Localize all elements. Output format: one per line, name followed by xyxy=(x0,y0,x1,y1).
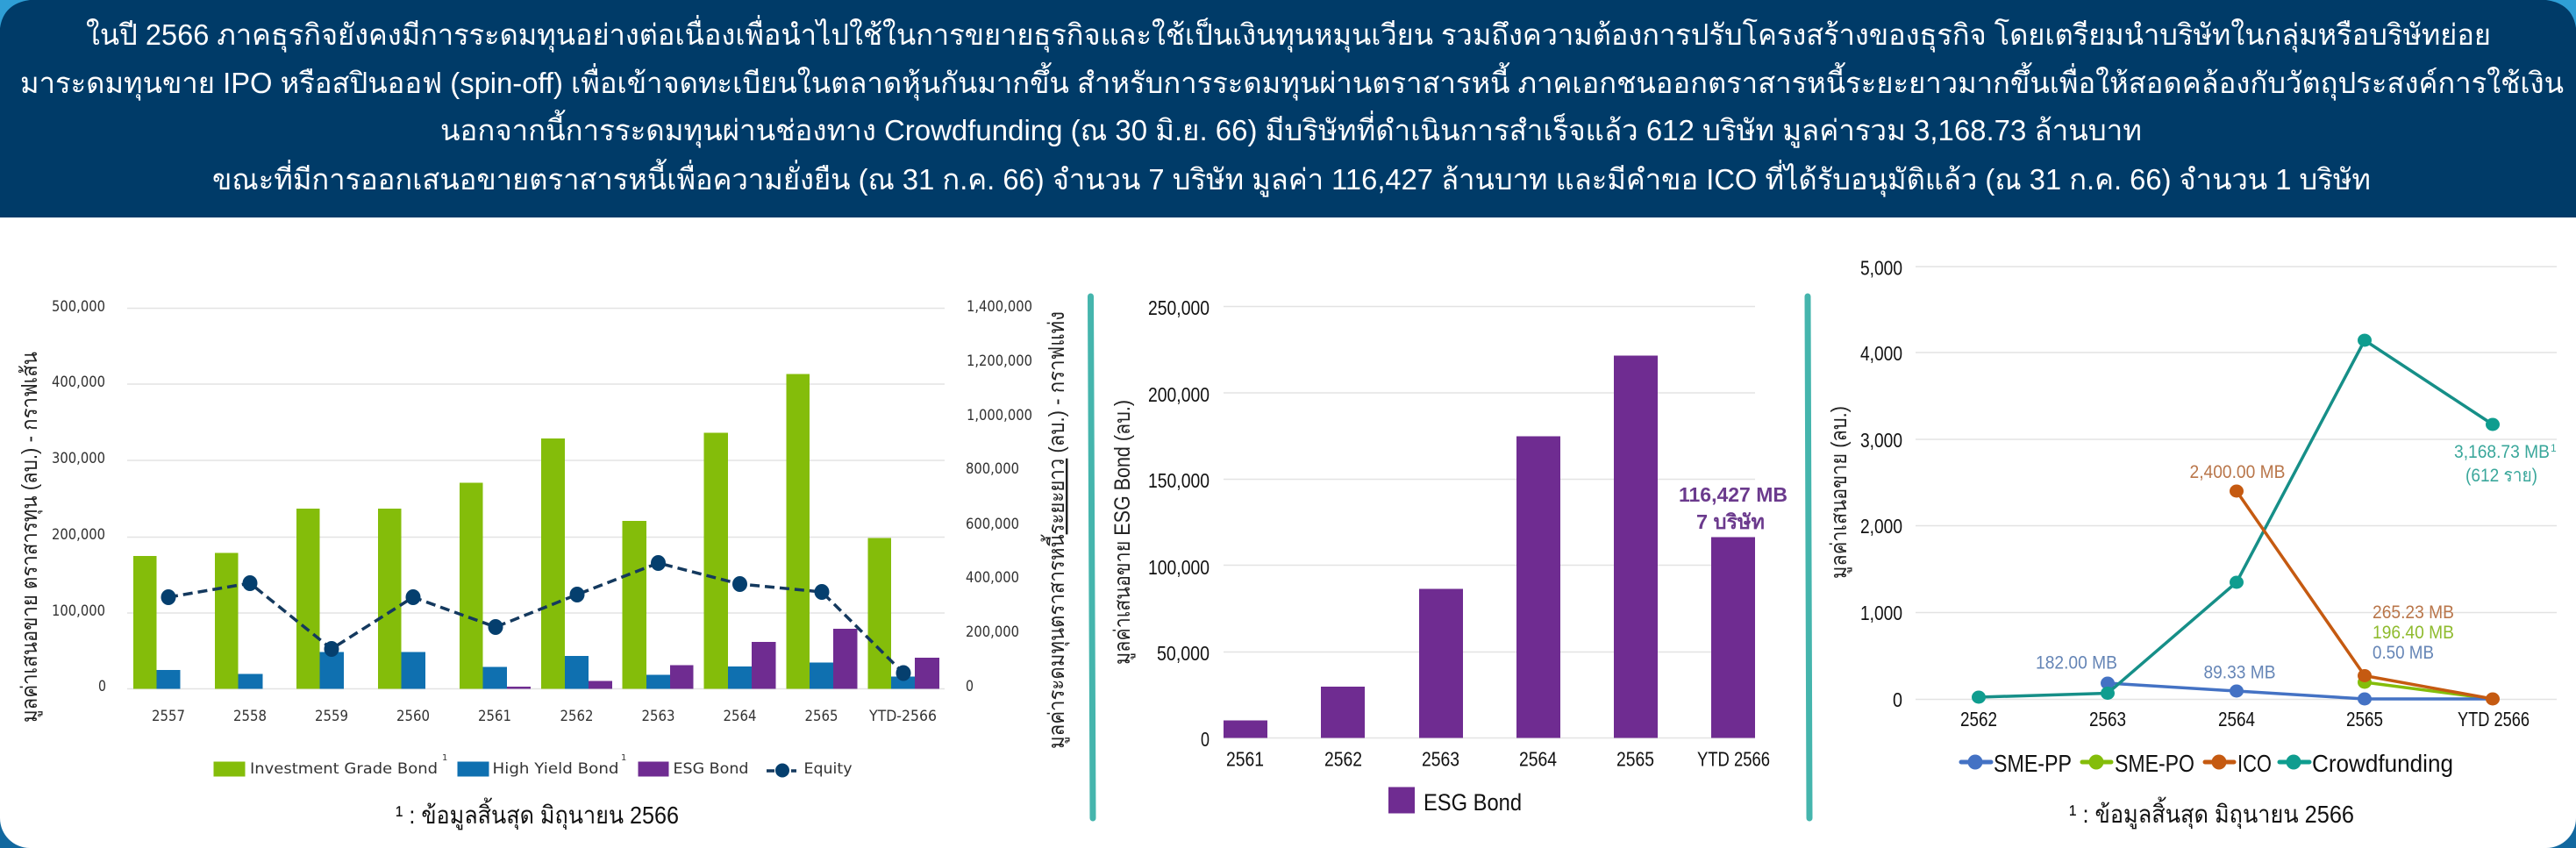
divider right xyxy=(1808,296,1809,818)
panel: SME, ICO and crowdfunding chart xyxy=(1827,256,2557,830)
legend: Equity xyxy=(803,760,853,778)
legend: High Yield Bond xyxy=(493,760,619,778)
category labels: 2562 xyxy=(560,708,593,725)
gridlines and value labels: 2,000 xyxy=(1860,515,1902,538)
category labels xyxy=(1960,708,2530,730)
legend: 1 xyxy=(442,753,447,763)
category labels: YTD 2566 xyxy=(2458,708,2530,730)
data labels: 89.33 MB xyxy=(2203,663,2275,682)
gridlines and value labels: 0 xyxy=(1893,688,1902,711)
gridlines and value labels: 200,000 xyxy=(1148,383,1210,406)
callout: YTD value: 7 บริษัท xyxy=(1696,510,1765,533)
gridlines and value labels: 3,000 xyxy=(1860,429,1902,452)
gridlines and value labels xyxy=(1860,256,2557,711)
category labels: 2559 xyxy=(315,708,348,725)
category labels: 2565 xyxy=(1616,747,1654,770)
header text line 1: ในปี 2566 ภาคธุรกิจยังคงมีการระดมทุนอย่างต่อเนื่องเพื่อนำไปใช้ในการขยายธุรกิจและใช้เป็นเงินทุนหมุนเวียน รวมถึงความต้องการปรับโครงสร้างของธุรกิจ โดยเตรียมนำบริษัทในกลุ่มหรือบริษัทย่อย xyxy=(86,15,2491,53)
axis title: มูลค่าเสนอขาย (ลบ.) xyxy=(1827,406,1852,579)
left axis gridlines and labels: 300,000 xyxy=(52,450,105,467)
category labels: 2558 xyxy=(233,708,267,725)
category labels: 2565 xyxy=(2346,708,2383,730)
right axis labels: 1,200,000 xyxy=(967,353,1032,370)
gridlines and value labels: 100,000 xyxy=(1148,556,1210,579)
category labels: 2563 xyxy=(1422,747,1459,770)
category labels xyxy=(152,708,937,725)
gridlines and value labels: 150,000 xyxy=(1148,469,1210,492)
legend: ICO xyxy=(2237,750,2272,777)
right axis labels xyxy=(966,298,1032,695)
panel: chart background xyxy=(0,175,2576,848)
category labels: 2564 xyxy=(2218,708,2255,730)
header text line 4: ขณะที่มีการออกเสนอขายตราสารหนี้เพื่อความยั่งยืน (ณ 31 ก.ค. 66) จำนวน 7 บริษัท มูลค่า 116,427 ล้านบาท และมีคำขอ ICO ที่ได้รับอนุมัติแล้ว (ณ 31 ก.ค. 66) จำนวน 1 บริษัท xyxy=(212,159,2371,197)
gridlines and value labels: 4,000 xyxy=(1860,342,1902,365)
category labels: YTD-2566 xyxy=(868,708,937,725)
left axis gridlines and labels xyxy=(52,298,945,695)
right axis labels: 400,000 xyxy=(966,569,1019,587)
right axis labels: 200,000 xyxy=(966,624,1019,641)
gridlines and value labels: 1,000 xyxy=(1860,602,1902,624)
bars: investment grade bond xyxy=(133,374,891,689)
legend: SME-PO xyxy=(2115,750,2194,777)
bars: ESG bond by year xyxy=(1224,356,1755,738)
category labels: 2565 xyxy=(805,708,838,725)
left axis gridlines and labels: 100,000 xyxy=(52,602,105,620)
axis title: มูลค่าเสนอขาย ESG Bond (ลบ.) xyxy=(1110,400,1136,665)
bars: high yield bond xyxy=(156,652,915,689)
category labels: 2560 xyxy=(396,708,430,725)
gridlines and value labels xyxy=(1148,296,1755,751)
category labels: 2564 xyxy=(723,708,756,725)
line: crowdfunding xyxy=(1972,333,2500,703)
gridlines and value labels: 0 xyxy=(1201,728,1210,751)
line: SME-PP xyxy=(2101,677,2493,705)
data labels: 196.40 MB xyxy=(2373,623,2454,643)
line: equity xyxy=(161,555,910,681)
line: SME-PO xyxy=(2358,675,2493,699)
bars: ESG bond xyxy=(507,629,939,689)
data labels: (612 ราย) xyxy=(2465,466,2537,486)
legend: SME-PP xyxy=(1994,750,2072,777)
category labels: 2562 xyxy=(1960,708,1997,730)
footnote: ¹ : ข้อมูลสิ้นสุด มิถุนายน 2566 xyxy=(396,797,679,830)
data labels: 3,168.73 MB xyxy=(2454,442,2550,462)
callout: YTD value: 116,427 MB xyxy=(1679,483,1788,506)
data labels: 265.23 MB xyxy=(2373,602,2454,623)
left axis gridlines and labels: 400,000 xyxy=(52,374,105,391)
category labels: 2561 xyxy=(478,708,511,725)
legend xyxy=(1388,787,1522,816)
gridlines and value labels: 250,000 xyxy=(1148,296,1210,319)
gridlines and value labels: 5,000 xyxy=(1860,256,1902,279)
axis title: left: มูลค่าเสนอขาย ตราสารทุน (ลบ.) - กราฟเส้น xyxy=(18,352,43,723)
right axis labels: 0 xyxy=(966,678,974,695)
data labels: 0.50 MB xyxy=(2373,643,2434,663)
gridlines and value labels: 50,000 xyxy=(1157,642,1210,665)
category labels: 2561 xyxy=(1226,747,1264,770)
legend: Investment Grade Bond xyxy=(250,760,438,778)
legend xyxy=(1961,750,2453,777)
category labels xyxy=(1226,747,1770,770)
legend xyxy=(214,753,853,778)
legend: 1 xyxy=(621,753,626,763)
footnote: ¹ : ข้อมูลสิ้นสุด มิถุนายน 2566 xyxy=(2069,796,2354,830)
data labels: 1 xyxy=(2551,442,2557,454)
category labels: 2557 xyxy=(152,708,185,725)
header banner xyxy=(0,0,2576,217)
panel: ESG bond chart xyxy=(1110,296,1788,816)
header text line 3: นอกจากนี้การระดมทุนผ่านช่องทาง Crowdfunding (ณ 30 มิ.ย. 66) มีบริษัทที่ดำเนินการสำเร็จแล้ว 612 บริษัท มูลค่ารวม 3,168.73 ล้านบาท xyxy=(440,110,2142,148)
callout: YTD value xyxy=(1679,483,1788,533)
category labels: 2564 xyxy=(1519,747,1557,770)
panel: bond and equity chart xyxy=(18,298,1070,830)
right axis labels: 800,000 xyxy=(966,460,1019,478)
left axis gridlines and labels: 0 xyxy=(98,678,106,695)
right axis labels: 1,000,000 xyxy=(967,407,1032,424)
right axis labels: 600,000 xyxy=(966,516,1019,533)
right axis labels: 1,400,000 xyxy=(967,298,1032,316)
category labels: 2562 xyxy=(1324,747,1362,770)
divider left xyxy=(1091,296,1093,818)
legend: Crowdfunding xyxy=(2312,750,2453,777)
category labels: 2563 xyxy=(642,708,675,725)
category labels: YTD 2566 xyxy=(1697,747,1770,770)
data labels: 2,400.00 MB xyxy=(2189,462,2286,482)
header text line 2: มาระดมทุนขาย IPO หรือสปินออฟ (spin-off) เพื่อเข้าจดทะเบียนในตลาดหุ้นกันมากขึ้น สำหรับการระดมทุนผ่านตราสารหนี้ ภาคเอกชนออกตราสารหนี้ระยะยาวมากขึ้นเพื่อให้สอดคล้องกับวัตถุประสงค์การใช้เงิน xyxy=(20,62,2564,101)
legend: ESG Bond xyxy=(1424,789,1522,816)
line: ICO xyxy=(2230,484,2500,705)
left axis gridlines and labels: 200,000 xyxy=(52,526,105,544)
data labels xyxy=(2036,442,2557,682)
left axis gridlines and labels: 500,000 xyxy=(52,298,105,316)
axis title: right: มูลค่าระดมทุนตราสารหนี้ระยะยาว (ลบ.) - กราฟแท่ง xyxy=(1040,311,1070,749)
category labels: 2563 xyxy=(2089,708,2126,730)
data labels: 182.00 MB xyxy=(2036,652,2117,673)
legend: ESG Bond xyxy=(674,760,749,778)
